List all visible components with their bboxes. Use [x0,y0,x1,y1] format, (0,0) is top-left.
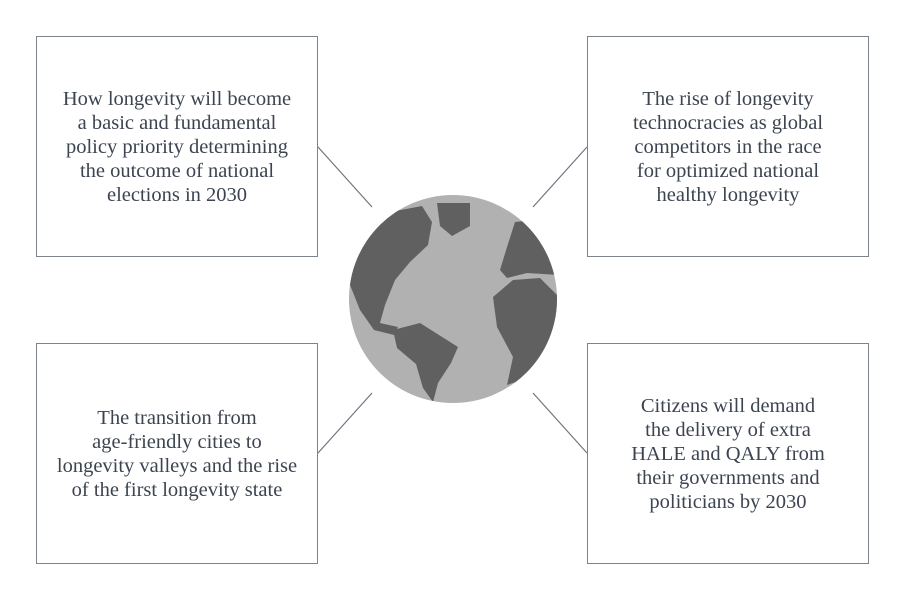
panel: bottom-right: their governments and [636,466,820,488]
panel: bottom-left [36,343,318,564]
panel: top-left [36,36,318,257]
panel: top-right: technocracies as global [633,112,823,134]
panel: top-left: elections in 2030 [107,184,247,206]
panel: bottom-right [587,343,869,564]
globe with connectors [318,146,587,454]
panel: top-right: healthy longevity [657,184,799,206]
connector lines [318,147,587,453]
panel: bottom-right: HALE and QALY from [631,442,825,464]
panel: top-right [587,36,869,257]
panel: top-left: How longevity will become [63,88,291,110]
panel: top-right: The rise of longevity [642,88,814,110]
panel: bottom-right: the delivery of extra [645,418,811,440]
panel: top-left: the outcome of national [80,160,274,182]
panel: top-right: for optimized national [637,160,819,182]
panel: top-left: a basic and fundamental [78,112,276,134]
panel: bottom-left: of the first longevity state [72,478,282,500]
panel: bottom-left: age-friendly cities to [92,430,262,452]
panel: bottom-left: longevity valleys and the rise [57,454,297,476]
panel: top-left: policy priority determining [66,136,288,158]
panel: bottom-right: Citizens will demand [641,394,815,416]
panel: bottom-right: politicians by 2030 [649,490,807,512]
panel: top-right: competitors in the race [634,136,822,158]
panel: bottom-left: The transition from [97,406,257,428]
icon: globe [348,195,560,403]
